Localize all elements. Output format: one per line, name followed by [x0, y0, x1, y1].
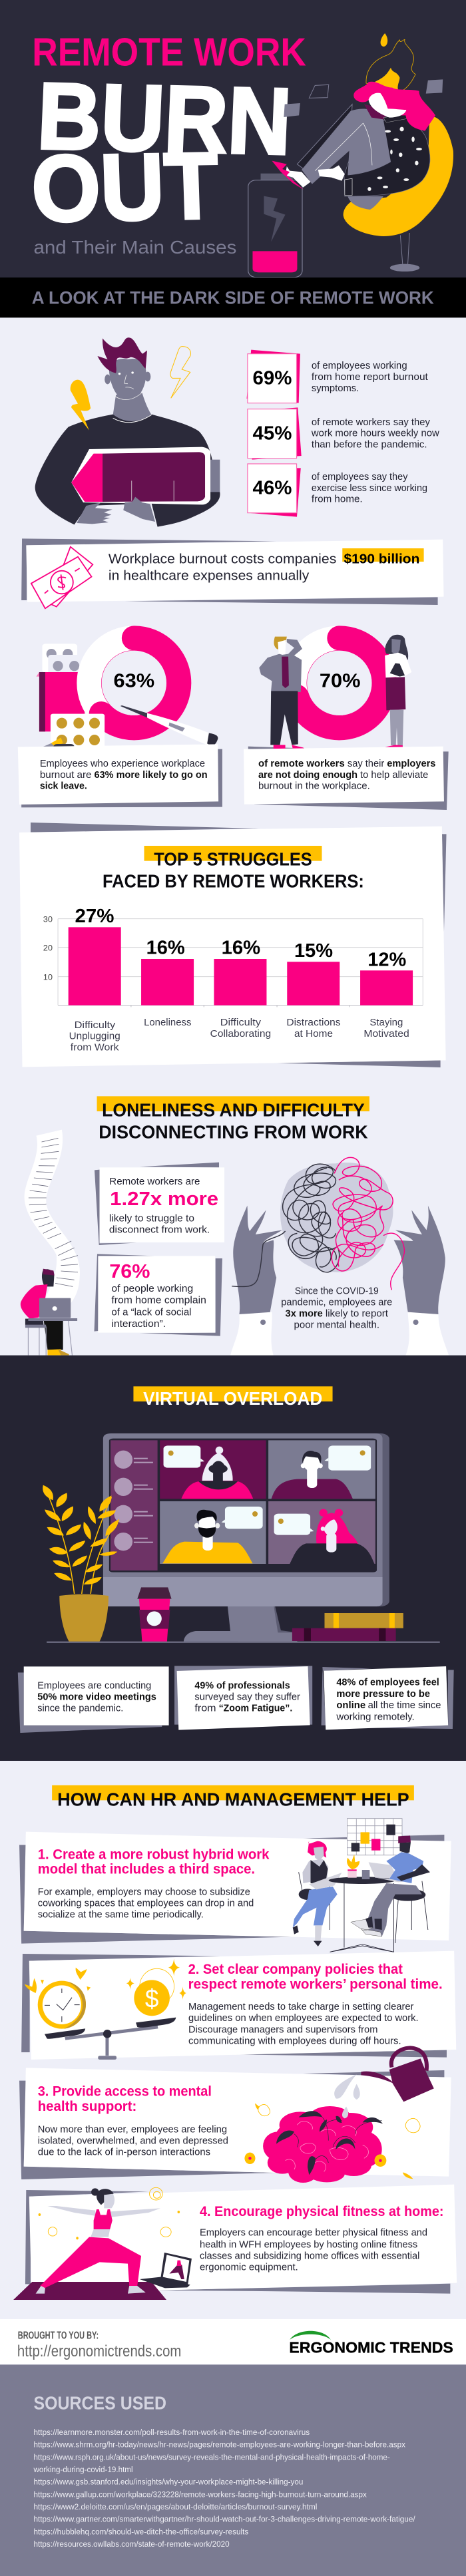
bar chart: 30 — [43, 915, 53, 924]
stat 69%: 69% — [252, 367, 292, 389]
donut chart: 70%: 70% — [320, 670, 361, 691]
heading — [133, 1386, 333, 1409]
text card: 1.27x more: 1.27x more — [110, 1189, 218, 1210]
text card: sick leave: Employees who experience workplace — [40, 757, 205, 769]
card: zoom fatigue: “Zoom Fatigue”. — [219, 1702, 292, 1714]
panel: healthcare cost — [21, 538, 444, 608]
left hand — [230, 1206, 282, 1356]
panel: physical fitness: ergonomic equipment. — [200, 2261, 298, 2273]
icon: money — [31, 547, 93, 608]
card: pressure to be online: online — [336, 1699, 365, 1710]
black subtitle band — [0, 277, 466, 317]
panel: healthcare cost: Workplace burnout costs companies — [109, 552, 336, 567]
text: covid: poor mental health. — [294, 1319, 379, 1330]
panel: virtual overload — [0, 1356, 466, 1761]
panel: hybrid work — [19, 1819, 451, 1952]
donut chart: 70% — [294, 638, 384, 728]
coffee cup — [137, 1587, 172, 1642]
card: zoom fatigue: 49% of professionals — [194, 1680, 290, 1691]
bar chart: Difficulty — [75, 1019, 116, 1030]
bar chart: 27% — [75, 906, 114, 927]
card: 50% more video meetings: since the pandemic. — [37, 1702, 123, 1714]
title: burn: BURN — [35, 63, 294, 174]
text card: 76%: of a “lack of social — [111, 1306, 191, 1318]
bar chart: Staying — [369, 1016, 403, 1027]
card: pressure to be online: all the time since — [368, 1699, 441, 1710]
illustration: wilting brain and watering can — [244, 2048, 434, 2183]
illustration: tangled brain held by hands — [230, 1157, 449, 1356]
stat 45% — [248, 407, 439, 460]
panel: 63% sick leave — [18, 638, 222, 807]
panel: mental health: 3. Provide access to mental — [38, 2084, 212, 2099]
panel: hybrid work: model that includes a third space. — [38, 1861, 255, 1877]
bar chart: Collaborating — [210, 1027, 271, 1039]
panel: 70% employers not doing enough — [244, 635, 449, 810]
panel: physical fitness — [13, 2185, 457, 2300]
plant — [43, 1485, 119, 1642]
panel: sources used: SOURCES USED — [33, 2393, 166, 2413]
heading: VIRTUAL OVERLOAD — [143, 1388, 322, 1409]
stat 69%: of employees working — [312, 359, 407, 371]
panel: healthcare cost: $190 billion — [344, 552, 419, 567]
panel: sources used: https://resources.owllabs.com/state-of-remote-work/2020 — [33, 2540, 230, 2549]
card: zoom fatigue — [174, 1666, 312, 1730]
text card: 76%: of people working — [111, 1282, 193, 1294]
text: covid: pandemic, employees are — [281, 1296, 392, 1308]
illustration: yoga woman with laptop — [13, 2187, 192, 2300]
card: 50% more video meetings: Employees are conducting — [37, 1680, 151, 1691]
text card: employers — [244, 747, 449, 810]
bar chart: Loneliness — [144, 1016, 192, 1027]
video tile: man — [272, 1445, 371, 1499]
stat 45%: of remote workers say they — [312, 416, 430, 427]
illustration: burned out woman on chair — [272, 33, 453, 272]
bar chart: 12% — [367, 949, 406, 970]
bar chart: from Work — [71, 1041, 119, 1053]
panel: company policies: communicating with employees during off hours. — [188, 2035, 401, 2046]
stat 46%: from home. — [312, 493, 363, 504]
text: covid: Since the COVID-19 — [295, 1285, 379, 1296]
text card: employers: to help alleviate — [360, 769, 428, 780]
text card: 1.27x more: disconnect from work. — [109, 1224, 210, 1235]
bar chart: 16% — [222, 937, 260, 958]
illustration: woman with clipboard — [385, 635, 411, 747]
icon: drained battery — [248, 174, 302, 277]
panel: mental health: Now more than ever, employees are feeling — [38, 2123, 227, 2135]
stat 46%: 46% — [252, 477, 292, 498]
footer: credits: BROUGHT TO YOU BY: — [18, 2329, 99, 2341]
bar chart: Distractions — [286, 1016, 341, 1027]
panel: hybrid work: For example, employers may choose to subsidize — [38, 1886, 250, 1897]
panel: mental health: due to the lack of in-person interactions — [38, 2146, 210, 2157]
panel: company policies — [21, 1951, 456, 2060]
panel: company policies: Discourage managers and supervisors from — [188, 2024, 377, 2035]
panel: hybrid work: coworking spaces that employees can drop in and — [38, 1897, 254, 1909]
text card: 1.27x more — [95, 1163, 224, 1245]
illustration: confused man — [248, 637, 315, 749]
shelf — [47, 1642, 440, 1643]
bar chart: 20 — [43, 944, 53, 953]
panel: sources used: working-during-covid-19.html — [33, 2466, 133, 2474]
donut chart: 63% — [89, 638, 179, 728]
panel: top 5 struggles — [19, 823, 447, 1067]
text card: employers: are not doing enough — [258, 769, 357, 780]
stat 69%: from home report burnout — [312, 371, 428, 382]
text: covid: 3x more — [286, 1308, 323, 1319]
panel: sources used — [0, 2364, 466, 2576]
text card: employers: of remote workers — [258, 757, 345, 769]
text card: 76%: interaction”. — [111, 1318, 166, 1329]
stat 46%: of employees say they — [312, 470, 408, 482]
right hand — [394, 1206, 449, 1356]
illustration: time vs money scale — [25, 1958, 186, 2060]
stat 69%: symptoms. — [312, 382, 359, 393]
illustration: stressed man holding low battery — [35, 337, 220, 527]
icon: medicine box — [36, 644, 85, 731]
text card: sick leave — [18, 744, 222, 807]
heading: loneliness: LONELINESS AND DIFFICULTY — [102, 1100, 365, 1121]
text card: 1.27x more: Remote workers are — [109, 1175, 200, 1187]
bar chart: 15% — [294, 940, 333, 962]
card: zoom fatigue: from — [194, 1702, 216, 1714]
floating paper scraps — [284, 79, 443, 117]
panel: healthcare cost: in healthcare expenses annually — [109, 568, 310, 584]
stat 45%: 45% — [252, 423, 292, 444]
heading: loneliness: DISCONNECTING FROM WORK — [99, 1122, 368, 1143]
heading: loneliness — [97, 1096, 369, 1143]
illustration: time vs money scale: $ — [145, 1984, 159, 2013]
panel: hybrid work: socialize at the same time periodically. — [38, 1909, 204, 1920]
text card: employers: burnout in the workplace. — [258, 780, 370, 791]
panel: hybrid work: 1. Create a more robust hybrid work — [38, 1847, 270, 1862]
panel: mental health: health support: — [38, 2098, 136, 2114]
bar chart: 10 — [43, 973, 53, 982]
text: covid: likely to report — [326, 1308, 388, 1319]
video tile: woman with pink hair — [274, 1509, 374, 1564]
illustration: coworking table — [293, 1819, 430, 1952]
monitor — [103, 1433, 389, 1642]
subtitle: and Their Main Causes — [33, 237, 236, 258]
panel: mental health — [19, 2048, 451, 2183]
card: zoom fatigue: surveyed say they suffer — [194, 1691, 300, 1702]
text card: 76%: 76% — [109, 1261, 150, 1282]
bar chart: 16% — [146, 937, 185, 958]
stat 46% — [248, 464, 427, 517]
text card: 76% — [95, 1254, 222, 1336]
panel: mental health: isolated, overwhelmed, and even depressed — [38, 2135, 228, 2146]
bar chart: at Home — [294, 1027, 333, 1039]
card: 50% more video meetings — [18, 1666, 169, 1733]
icon: thermometer — [120, 705, 218, 746]
stat 46%: exercise less since working — [312, 482, 427, 493]
heading: TOP 5 STRUGGLES — [154, 849, 312, 870]
text card: employers: employers — [387, 757, 435, 769]
illustration: endless paper and person at laptop — [21, 1130, 80, 1356]
footer: credits — [0, 2319, 466, 2364]
footer: credits: http://ergonomictrends.com — [17, 2342, 181, 2360]
bar chart: Motivated — [363, 1027, 409, 1039]
bar chart — [43, 906, 423, 1053]
text card: sick leave: 63% more likely to go on — [95, 769, 208, 780]
text card: 76%: from home complain — [111, 1294, 206, 1306]
stacked books — [292, 1613, 403, 1641]
stat 69% — [247, 350, 428, 403]
icon: pills — [41, 714, 105, 750]
video tile: woman with bun — [164, 1445, 253, 1499]
card: pressure to be online: more pressure to be — [336, 1688, 430, 1699]
panel: sources used: https://www.gsb.stanford.edu/insights/why-your-workplace-might-be-killing-you — [33, 2478, 303, 2487]
text: covid — [281, 1285, 392, 1330]
text card: sick leave: burnout are — [40, 769, 91, 780]
title: out: OUT — [30, 133, 220, 242]
donut chart: 63%: 63% — [114, 670, 154, 691]
panel: sources used: https://learnmore.monster.com/poll-results-from-work-in-the-time-of-coronavirus — [33, 2428, 310, 2437]
text card: sick leave: sick leave. — [40, 780, 87, 791]
text card: employers: say their — [348, 757, 384, 769]
brain — [232, 1157, 404, 1290]
heading — [103, 846, 364, 892]
header panel — [0, 0, 466, 277]
card: 50% more video meetings: 50% more video meetings — [37, 1691, 156, 1702]
card: pressure to be online: working remotely. — [336, 1711, 415, 1722]
bar chart: Difficulty — [220, 1016, 261, 1027]
stat 45%: than before the pandemic. — [312, 439, 427, 450]
video tile: bearded man — [162, 1507, 263, 1563]
panel: sources used: https://www2.deloitte.com/us/en/pages/about-deloitte/articles/burnout-survey.html — [33, 2503, 317, 2511]
logo: ergonomic trends — [289, 2331, 453, 2356]
text card: 1.27x more: likely to struggle to — [109, 1212, 194, 1224]
panel: sources used: https://hubblehq.com/should-we-ditch-the-office/survey-results — [33, 2527, 248, 2537]
card: pressure to be online — [322, 1666, 454, 1730]
bar chart: Unplugging — [69, 1030, 120, 1041]
title: remote work: REMOTE WORK — [32, 30, 306, 74]
